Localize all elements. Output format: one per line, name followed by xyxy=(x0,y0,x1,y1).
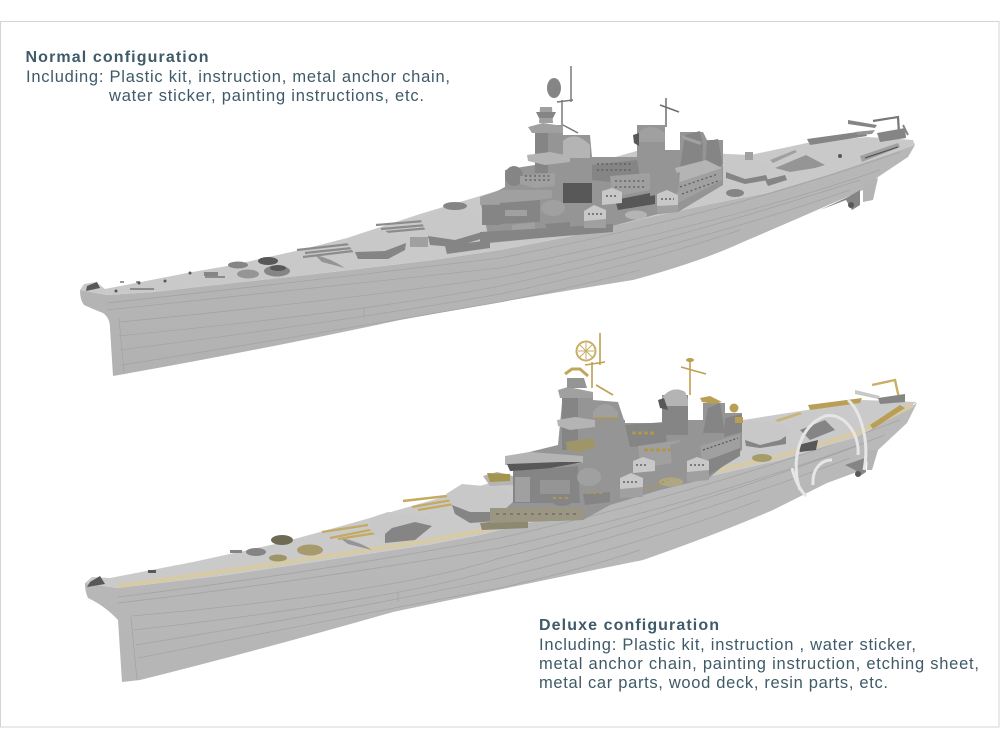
aft towers xyxy=(637,127,665,170)
domed director xyxy=(593,404,618,418)
gold wood deck edge xyxy=(118,405,913,586)
heading: Normal configuration xyxy=(26,49,208,66)
domed director xyxy=(563,136,590,158)
forward deck fittings xyxy=(86,255,345,292)
aft turret xyxy=(735,417,790,462)
watermark swirl xyxy=(792,400,866,496)
normal configuration ship xyxy=(80,66,915,376)
heading: Deluxe configuration xyxy=(539,617,719,634)
rudder and propellers xyxy=(845,450,878,477)
parts list xyxy=(26,68,450,105)
parts list: metal anchor chain, painting instruction, etching sheet, xyxy=(539,655,979,673)
brass masts and radar dish xyxy=(576,333,706,395)
parts list xyxy=(539,636,979,692)
aft towers xyxy=(662,390,688,435)
gun mount boxes xyxy=(620,473,643,490)
forward turrets with guns xyxy=(297,202,490,259)
forward turrets with brass guns xyxy=(322,484,528,543)
quarterdeck catapults and fittings xyxy=(765,131,900,186)
parts list: Including: Plastic kit, instruction , water sticker, xyxy=(539,636,916,654)
deck xyxy=(80,137,915,295)
floatplanes and crane xyxy=(848,117,908,142)
main tower xyxy=(562,398,593,450)
deck xyxy=(85,400,917,588)
forward deck fittings xyxy=(87,535,372,587)
gun mount boxes xyxy=(584,205,606,222)
deluxe configuration ship xyxy=(85,333,917,682)
text block: normal configuration xyxy=(26,49,450,105)
hull xyxy=(80,145,915,376)
parts list: metal car parts, wood deck, resin parts, etc. xyxy=(539,674,888,692)
quarterdeck fittings, brass catapults and crane xyxy=(775,380,905,452)
aft turret xyxy=(722,152,770,197)
parts list: water sticker, painting instructions, etc. xyxy=(108,87,424,105)
forward platform xyxy=(505,452,583,466)
mid deckhouses xyxy=(592,160,640,182)
parts list: Including: Plastic kit, instruction, metal anchor chain, xyxy=(26,68,450,86)
mid deckhouses xyxy=(625,422,667,447)
superstructure xyxy=(480,66,723,243)
masts and dish xyxy=(547,66,679,133)
hull plating lines xyxy=(107,152,900,372)
main tower xyxy=(535,125,563,173)
superstructure xyxy=(483,333,742,523)
base silhouette xyxy=(480,125,723,243)
text block: deluxe configuration xyxy=(539,617,979,692)
hull xyxy=(85,403,917,682)
rudder and propellers xyxy=(820,178,878,210)
hull plating lines xyxy=(118,420,900,680)
forward deck platform and tubs xyxy=(480,190,552,205)
base silhouette xyxy=(490,395,742,523)
